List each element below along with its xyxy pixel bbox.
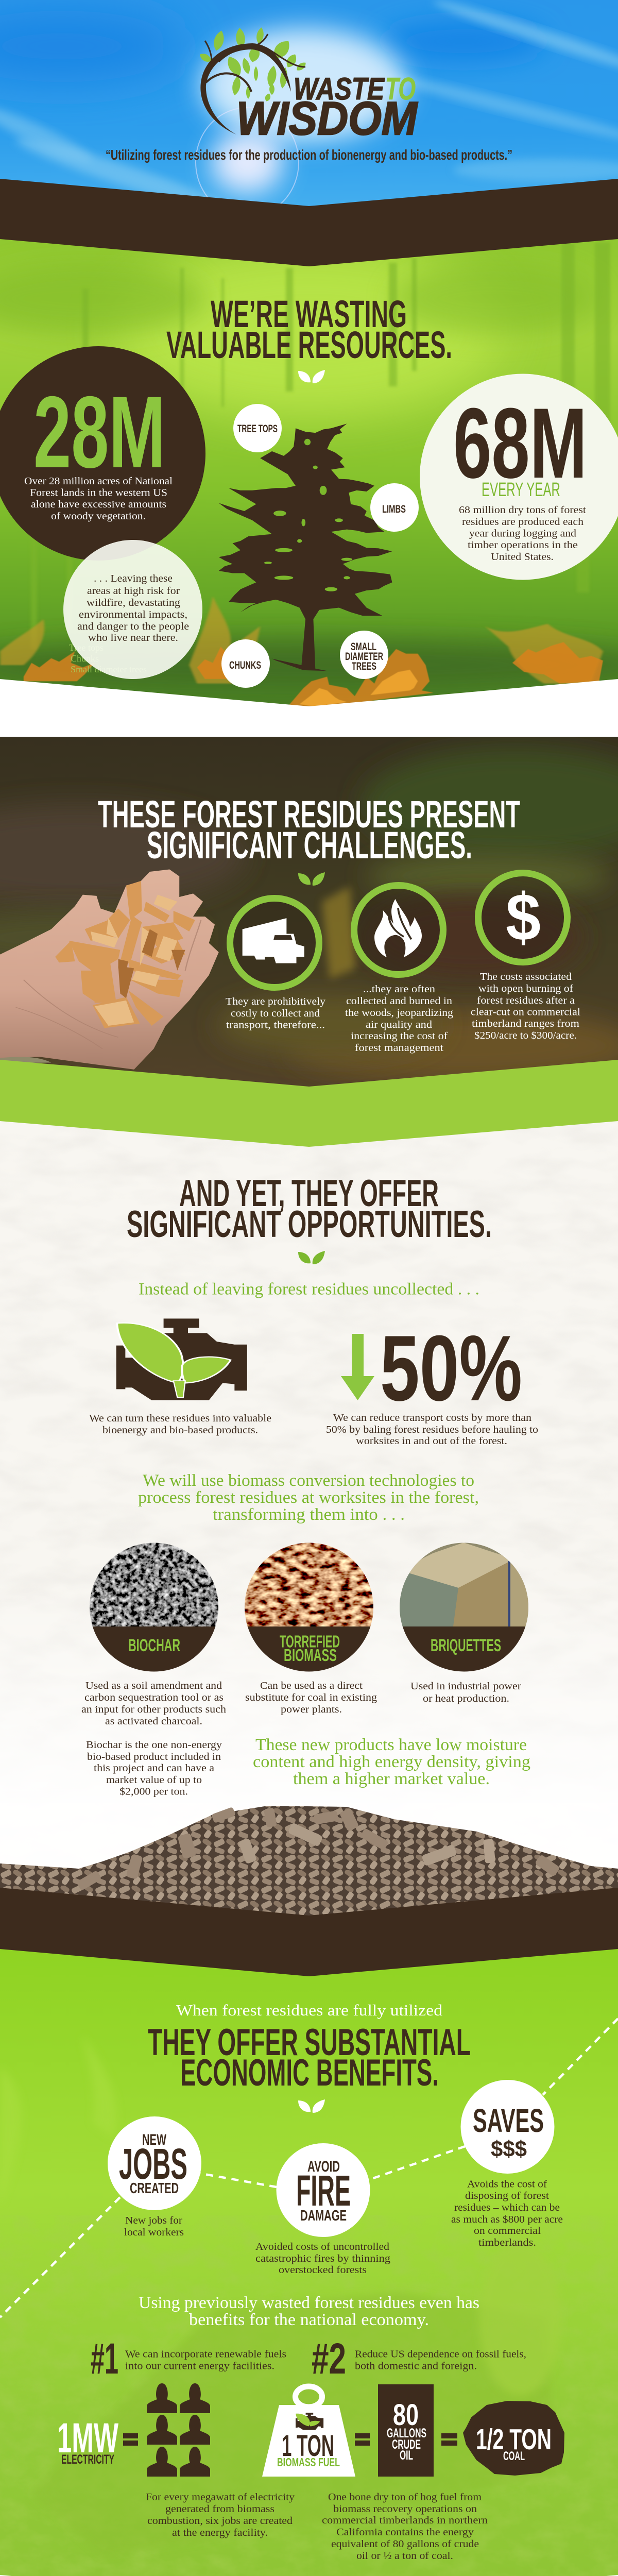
text: burning: increasing the cost of — [351, 1030, 448, 1042]
text: jobs caption: New jobs for — [125, 2215, 182, 2226]
header logo — [198, 27, 418, 145]
benefit: avoid fire damage: AVOID — [307, 2158, 340, 2175]
heading: opportunities: AND YET, THEY OFFER — [179, 1173, 439, 1214]
stat: 68M every year — [420, 374, 618, 580]
callout: wildfire risk: . . . Leaving these — [94, 573, 173, 584]
bubble: limbs: LIMBS — [382, 503, 406, 515]
text: biochar uses: Used as a soil amendment and — [85, 1680, 222, 1691]
text: biochar uses: this project and can have a — [94, 1762, 214, 1774]
equals sign — [355, 2433, 370, 2446]
panel: economic background — [0, 1947, 618, 2576]
text: briquette uses: or heat production. — [423, 1693, 509, 1704]
dashed connector — [0, 2019, 618, 2317]
coal block: 1/2 TON — [476, 2423, 552, 2456]
text: conversion technologies: process forest residues at worksites in the forest, — [138, 1488, 479, 1507]
text: market value: content and high energy density, giving — [253, 1753, 530, 1771]
text: bioenergy products — [89, 1413, 271, 1436]
text: transport cost — [226, 996, 325, 1031]
point 1: into our current energy facilities. — [125, 2361, 274, 2372]
text: saves caption: as much as $800 per acre — [451, 2214, 563, 2225]
panel: challenges background — [0, 737, 618, 1123]
point 2: #2 — [312, 2334, 346, 2383]
header logo: WISDOM — [236, 93, 418, 145]
text: burning — [345, 984, 453, 1054]
crude oil block: OIL — [400, 2448, 413, 2463]
text: fire caption: Avoided costs of uncontrolled — [255, 2241, 389, 2252]
text: biochar uses: Biochar is the one non-energy — [86, 1739, 222, 1751]
heading: economic benefits: ECONOMIC BENEFITS. — [180, 2052, 439, 2094]
bubble: small diameter trees — [340, 631, 388, 679]
faint residue list text: Tree tops — [69, 642, 104, 653]
text: megawatt jobs: combustion, six jobs are created — [147, 2515, 293, 2527]
stat: 28M: Forest lands in the western US — [30, 487, 167, 499]
benefit: new jobs: NEW — [142, 2131, 166, 2148]
equation: 1MW equals six jobs: 1MW — [57, 2415, 118, 2462]
text: jobs caption: local workers — [124, 2227, 184, 2238]
icon: flame in ring — [354, 885, 443, 975]
text: saves caption: residues – which can be — [454, 2202, 560, 2213]
flames — [0, 596, 603, 706]
coal block: COAL — [503, 2449, 525, 2463]
crude oil block: CRUDE — [392, 2437, 421, 2452]
band: brown chevron — [0, 179, 618, 266]
photo: hand holding wood chips — [0, 869, 219, 1070]
product: torrefied biomass: BIOMASS — [284, 1646, 337, 1665]
point 1: #1 — [91, 2334, 118, 2383]
heading: opportunities — [127, 1173, 492, 1245]
text: fire caption — [255, 2241, 390, 2276]
faint residue list text — [69, 645, 103, 672]
icon: leaf divider — [298, 1251, 325, 1264]
text: saves caption: Avoids the cost of — [467, 2178, 547, 2190]
equation: 1MW equals six jobs: ELECTRICITY — [61, 2452, 114, 2467]
text: biochar uses: bio-based product included in — [87, 1751, 221, 1762]
crude oil block: GALLONS — [387, 2426, 426, 2441]
stat: 68M every year: United States. — [491, 551, 554, 563]
callout: wildfire risk: environmental impacts, — [79, 609, 187, 620]
stat: 68M every year: 68 million dry tons of forest — [459, 504, 586, 516]
bubble: tree tops: TREE TOPS — [237, 423, 278, 435]
benefit: avoid fire damage: DAMAGE — [300, 2208, 347, 2224]
text: saves caption: on commercial — [474, 2225, 541, 2236]
callout: wildfire risk — [63, 540, 202, 679]
text: market value: These new products have low moisture — [255, 1736, 527, 1754]
text: open burning costs: $250/acre to $300/acre. — [474, 1030, 577, 1041]
text: national economy — [139, 2294, 479, 2329]
text: burning: air quality and — [366, 1019, 432, 1030]
text: torrefied uses: Can be used as a direct — [260, 1680, 363, 1691]
product: torrefied biomass — [244, 1543, 374, 1673]
photo: wood pellet pile — [0, 1806, 618, 1922]
text: burning: the woods, jeopardizing — [345, 1007, 453, 1019]
product: briquettes — [400, 1543, 528, 1673]
callout: wildfire risk: who live near there. — [88, 632, 178, 643]
text: biochar uses: $2,000 per ton. — [119, 1786, 188, 1797]
text: biochar uses: market value of up to — [106, 1774, 202, 1786]
product: biochar: BIOCHAR — [128, 1636, 180, 1655]
faint residue list text: Small diameter trees — [71, 664, 147, 674]
text: megawatt jobs: generated from biomass — [165, 2503, 274, 2515]
text: conversion technologies — [138, 1471, 479, 1524]
text: transport cost: transport, therefore... — [226, 1020, 325, 1031]
text: national economy: benefits for the national economy. — [189, 2311, 429, 2329]
stat: 28M: of woody vegetation. — [51, 511, 146, 522]
icon: truck in ring — [230, 899, 319, 987]
icon: leaf divider — [298, 2099, 325, 2113]
band: white chevron — [0, 679, 618, 767]
bubble: chunks — [221, 639, 270, 688]
text: energy equivalence — [322, 2492, 488, 2562]
product: biochar — [90, 1543, 218, 1673]
benefit: saves money: SAVES — [473, 2102, 544, 2139]
icon: dollar in ring: $ — [506, 879, 541, 955]
heading: wasting resources: WE’RE WASTING — [211, 293, 407, 335]
icon: down arrow and 50 percent: 50% — [380, 1316, 522, 1420]
text: bioenergy products: We can turn these residues into valuable — [89, 1413, 271, 1424]
benefit: new jobs: CREATED — [130, 2180, 179, 2197]
text: biochar uses: an input for other products such — [81, 1704, 226, 1715]
point 2 — [312, 2334, 526, 2383]
intro line: Instead of leaving forest residues uncollected . . . — [139, 1280, 479, 1298]
callout: wildfire risk: wildfire, devastating — [87, 597, 180, 608]
stat: 28M — [0, 346, 205, 561]
text: energy equivalence: oil or ½ a ton of coal. — [356, 2550, 453, 2562]
text: burning: collected and burned in — [346, 995, 452, 1007]
icon: engine with leaf — [116, 1318, 247, 1400]
text: market value — [253, 1736, 530, 1788]
text: torrefied uses — [245, 1680, 377, 1715]
text: conversion technologies: transforming them into . . . — [213, 1505, 405, 1524]
text: megawatt jobs — [146, 2492, 295, 2538]
icon: dollar in ring — [478, 873, 568, 962]
benefit: saves money: $$$ — [491, 2137, 527, 2162]
section: sky header — [0, 0, 618, 206]
stat: 68M every year: timber operations in the — [468, 539, 578, 551]
text: transport savings — [326, 1412, 538, 1447]
bubble: small diameter trees: DIAMETER — [345, 651, 383, 663]
stat: 28M: alone have excessive amounts — [31, 499, 166, 510]
text: open burning costs: with open burning of — [478, 983, 573, 994]
text: national economy: Using previously wasted forest residues even has — [139, 2294, 479, 2312]
bubble: tree tops — [233, 404, 282, 452]
text: transport savings: We can reduce transport costs by more than — [333, 1412, 531, 1423]
text: energy equivalence: biomass recovery operations on — [333, 2503, 477, 2515]
band: brown chevron — [0, 1888, 618, 1976]
point 1: We can incorporate renewable fuels — [125, 2348, 286, 2360]
text: transport savings: 50% by baling forest residues before hauling to — [326, 1424, 538, 1435]
text: biochar uses: carbon sequestration tool or as — [84, 1692, 224, 1703]
icon: leaf divider — [298, 872, 325, 886]
text: fire caption: overstocked forests — [279, 2264, 367, 2276]
point 2: Reduce US dependence on fossil fuels, — [355, 2348, 526, 2360]
heading: wasting resources — [166, 293, 452, 366]
text: market value: them a higher market value. — [293, 1770, 490, 1788]
text: jobs caption — [124, 2215, 184, 2238]
header logo: WASTE — [294, 72, 385, 106]
callout: wildfire risk: areas at high risk for — [87, 585, 180, 597]
coal block — [463, 2401, 564, 2476]
benefit: saves money — [460, 2080, 554, 2174]
icon: one ton biomass weight: 1 TON — [282, 2429, 334, 2463]
equals sign — [441, 2433, 457, 2446]
text: biochar uses — [81, 1680, 226, 1797]
icon: leaf divider — [298, 370, 325, 383]
text: briquette uses — [410, 1681, 521, 1704]
bubble: chunks: CHUNKS — [229, 659, 261, 671]
bubble: small diameter trees: SMALL — [351, 641, 376, 653]
text: conversion technologies: We will use biomass conversion technologies to — [143, 1471, 474, 1490]
panel: wood chip background — [0, 1121, 618, 1731]
heading: economic benefits — [148, 2022, 471, 2094]
stat: 68M every year: residues are produced each — [462, 516, 583, 528]
text: megawatt jobs: For every megawatt of electricity — [146, 2492, 295, 2503]
text: saves caption: disposing of forest — [465, 2190, 549, 2201]
benefit: new jobs: JOBS — [119, 2140, 187, 2188]
text: energy equivalence: equivalent of 80 gallons of crude — [331, 2538, 479, 2550]
tree silhouette — [219, 423, 392, 671]
text: torrefied uses: substitute for coal in existing — [245, 1692, 377, 1703]
text: transport cost: costly to collect and — [231, 1008, 320, 1019]
text: burning: ...they are often — [363, 984, 435, 995]
band: white chevron — [0, 2575, 618, 2576]
text: burning: forest management — [355, 1042, 443, 1054]
text: transport cost: They are prohibitively — [226, 996, 325, 1007]
callout: wildfire risk: and danger to the people — [77, 621, 189, 632]
stat: 68M every year: EVERY YEAR — [482, 479, 560, 501]
text: energy equivalence: California contains the energy — [336, 2527, 474, 2538]
crude oil block — [378, 2384, 434, 2477]
text: open burning costs: forest residues after a — [477, 995, 575, 1006]
text: bioenergy products: bioenergy and bio-based products. — [102, 1425, 258, 1436]
text: energy equivalence: commercial timberlands in northern — [322, 2515, 488, 2526]
icon: one ton biomass weight — [262, 2386, 355, 2477]
heading: challenges — [98, 793, 520, 867]
stat: 68M every year: year during logging and — [469, 528, 576, 539]
text: fire caption: catastrophic fires by thinning — [255, 2253, 390, 2264]
equation: 1MW equals six jobs — [57, 2383, 210, 2477]
bubble: small diameter trees: TREES — [352, 660, 376, 672]
benefit: avoid fire damage — [276, 2143, 370, 2237]
stat: 28M: 28M — [33, 375, 165, 489]
faint residue list text: Chunks — [71, 653, 99, 664]
product: briquettes: BRIQUETTES — [431, 1636, 501, 1655]
bubble: limbs — [370, 483, 419, 532]
lead-in text: When forest residues are fully utilized — [176, 2001, 443, 2019]
benefit: avoid fire damage: FIRE — [296, 2166, 351, 2215]
text: open burning costs: clear-cut on commercial — [471, 1007, 580, 1018]
text: saves caption — [451, 2178, 563, 2248]
text: torrefied uses: power plants. — [281, 1704, 342, 1715]
text: megawatt jobs: at the energy facility. — [172, 2527, 268, 2538]
stat: 28M: Over 28 million acres of National — [24, 476, 173, 487]
icon: down arrow and 50 percent — [341, 1316, 522, 1420]
icon: one ton biomass weight: BIOMASS FUEL — [277, 2455, 340, 2469]
text: saves caption: timberlands. — [478, 2237, 536, 2248]
text: open burning costs: timberland ranges from — [472, 1018, 579, 1029]
text: biochar uses: as activated charcoal. — [105, 1716, 202, 1727]
band: green chevron — [0, 1060, 618, 1147]
text: energy equivalence: One bone dry ton of hog fuel from — [328, 2492, 482, 2503]
text: open burning costs: The costs associated — [480, 971, 572, 982]
benefit: new jobs — [108, 2116, 201, 2210]
point 1 — [91, 2334, 286, 2383]
crude oil block: 80 — [393, 2398, 419, 2432]
text: transport savings: worksites in and out of the forest. — [356, 1435, 507, 1447]
point 2: both domestic and foreign. — [355, 2361, 477, 2372]
product: torrefied biomass: TORREFIED — [280, 1632, 340, 1651]
text: briquette uses: Used in industrial power — [410, 1681, 521, 1692]
header logo: TO — [385, 72, 416, 106]
text: open burning costs — [471, 971, 580, 1041]
panel: forest background — [0, 237, 618, 742]
